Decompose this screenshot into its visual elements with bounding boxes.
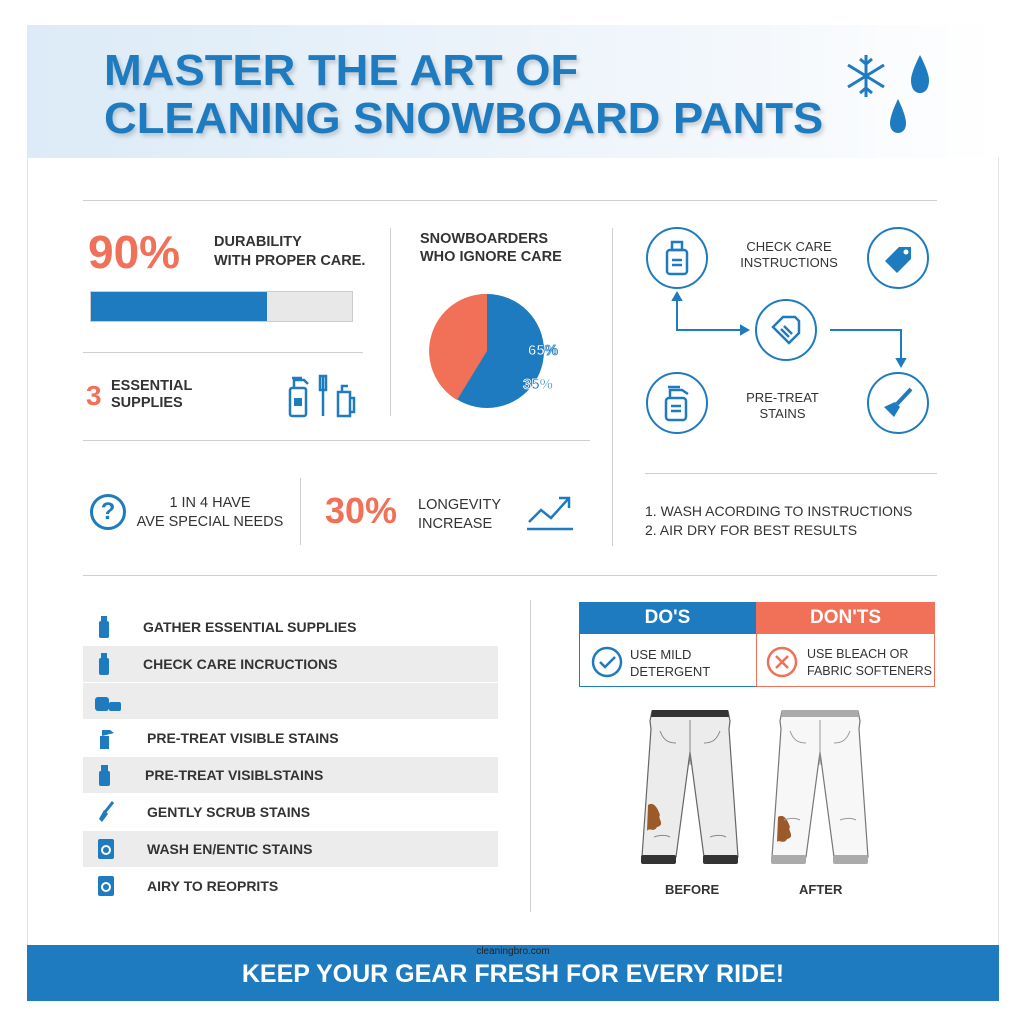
stat: 30% longevity xyxy=(325,490,573,532)
footer banner xyxy=(27,945,999,1001)
checklist steps: CHECK CARE INCRUCTIONS xyxy=(143,656,337,672)
icons: supplies xyxy=(288,374,356,418)
stat: 1 in 4 special needs: ? xyxy=(101,498,115,525)
checklist steps: GATHER ESSENTIAL SUPPLIES xyxy=(143,619,356,635)
stat: 30% longevity: 30% xyxy=(325,490,397,531)
step: check care instructions xyxy=(646,227,708,289)
icon: brush xyxy=(867,372,929,434)
pie chart: snowboarders who ignore care: 65% xyxy=(528,342,558,359)
text: wash instructions: 2. AIR DRY FOR BEST RESULTS xyxy=(645,522,857,538)
stat: 3 essential supplies: 3 xyxy=(86,380,102,411)
do's and don'ts table: USE BLEACH OR xyxy=(807,647,908,661)
stat: 90% durability: WITH PROPER CARE. xyxy=(214,253,365,269)
checklist steps: PRE-TREAT VISIBLSTAINS xyxy=(145,767,323,783)
checklist steps: PRE-TREAT VISIBLE STAINS xyxy=(147,730,339,746)
pie chart: snowboarders who ignore care: WHO IGNORE CARE xyxy=(420,249,562,265)
flow diagram xyxy=(646,227,929,434)
do's and don'ts table: DETERGENT xyxy=(630,664,710,679)
flow diagram: INSTRUCTIONS xyxy=(740,255,838,270)
stat: 3 essential supplies: SUPPLIES xyxy=(111,395,183,411)
flow diagram: STAINS xyxy=(760,406,806,421)
do's and don'ts table: DON'TS xyxy=(810,607,881,628)
pie chart: snowboarders who ignore care xyxy=(420,231,562,408)
checklist steps: AIRY TO REOPRITS xyxy=(147,878,278,894)
icon: tag xyxy=(867,227,929,289)
stat: 3 essential supplies xyxy=(86,374,356,418)
stat: 1 in 4 special needs xyxy=(90,494,283,530)
illustration: after pants xyxy=(771,710,869,897)
stat: 90% durability xyxy=(88,226,365,322)
icon: snowflake and drops xyxy=(847,55,929,133)
text: wash instructions: 1. WASH ACORDING TO INSTRUCTIONS xyxy=(645,503,912,519)
illustration: before pants xyxy=(641,710,739,897)
illustration: after pants: AFTER xyxy=(799,882,842,897)
stat: 3 essential supplies: ESSENTIAL xyxy=(111,378,192,394)
icon: cross xyxy=(766,646,798,678)
flow diagram: PRE-TREAT xyxy=(746,390,819,405)
text: wash instructions xyxy=(645,503,912,538)
pie chart: snowboarders who ignore care: 35% xyxy=(523,376,553,393)
illustration: before pants: BEFORE xyxy=(665,882,719,897)
progress bar xyxy=(90,291,353,322)
icon: check xyxy=(592,646,622,678)
checklist steps: GENTLY SCRUB STAINS xyxy=(147,804,310,820)
stat: 30% longevity: INCREASE xyxy=(418,516,492,532)
footer banner: KEEP YOUR GEAR FRESH FOR EVERY RIDE! xyxy=(242,960,784,988)
icon: center tag xyxy=(755,299,817,361)
stat: 1 in 4 special needs: 1 IN 4 HAVE xyxy=(169,495,251,511)
pie chart: snowboarders who ignore care: SNOWBOARDERS xyxy=(420,231,548,247)
main card xyxy=(27,157,999,947)
stat: 90% durability: DURABILITY xyxy=(214,234,302,250)
icon: trend xyxy=(527,496,573,530)
title xyxy=(104,46,825,143)
flow diagram: CHECK CARE xyxy=(746,239,832,254)
do's and don'ts table xyxy=(579,602,935,687)
do's and don'ts table: FABRIC SOFTENERS xyxy=(807,664,932,678)
stat: 1 in 4 special needs: AVE SPECIAL NEEDS xyxy=(137,514,283,530)
header band xyxy=(27,25,1000,158)
step: pre-treat stains xyxy=(646,372,708,434)
arrows xyxy=(671,291,907,368)
checklist steps xyxy=(83,616,498,896)
do's and don'ts table: DO'S xyxy=(645,607,690,628)
do's and don'ts table: USE MILD xyxy=(630,647,691,662)
stat: 30% longevity: LONGEVITY xyxy=(418,497,501,513)
stat: 90% durability: 90% xyxy=(88,226,180,278)
footer banner: cleaningbro.com xyxy=(476,946,550,957)
title: MASTER THE ART OF xyxy=(104,46,578,95)
title: CLEANING SNOWBOARD PANTS xyxy=(104,94,823,143)
checklist steps: WASH EN/ENTIC STAINS xyxy=(147,841,312,857)
